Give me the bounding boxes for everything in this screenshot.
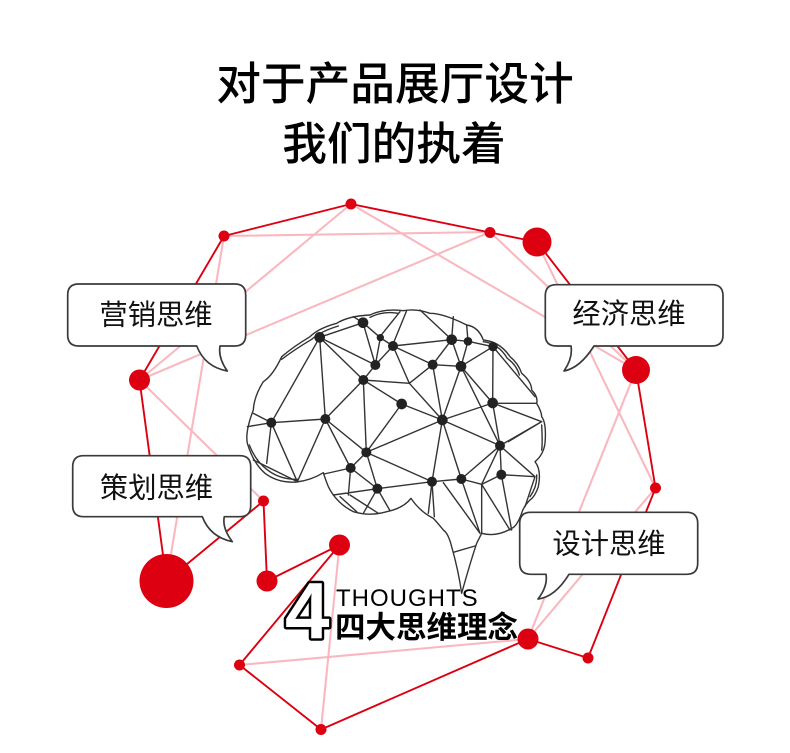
- red ring line: [140, 204, 656, 730]
- THOUGHTS label: THOUGHTS: [336, 585, 479, 612]
- callout: 经济思维: [545, 285, 723, 371]
- callout: 营销思维: 营销思维: [99, 298, 213, 330]
- callout: 营销思维: [68, 284, 246, 371]
- brain nodes: [266, 317, 506, 494]
- brain mesh lines: [247, 310, 542, 552]
- callout: 设计思维: 设计思维: [552, 528, 666, 560]
- title: 我们的执着: [282, 120, 506, 170]
- brain illustration: [247, 310, 545, 593]
- callout: 设计思维: [520, 512, 698, 599]
- red network: outer ring and pink links: [129, 198, 661, 735]
- chinese subtitle: 四大思维理念: [335, 610, 518, 645]
- callout: 策划思维: [73, 456, 251, 542]
- large outlined numeral 4: 4: [285, 566, 330, 655]
- brain outline: [247, 310, 545, 593]
- center label: 4 thoughts: [285, 566, 518, 655]
- callout: 经济思维: 经济思维: [572, 298, 686, 330]
- inner double outline: [249, 313, 542, 497]
- title: 对于产品展厅设计: [216, 60, 574, 110]
- red nodes: [129, 198, 661, 735]
- title: [216, 60, 574, 170]
- callout: 策划思维: 策划思维: [100, 472, 213, 504]
- pink connecting lines: [140, 204, 656, 730]
